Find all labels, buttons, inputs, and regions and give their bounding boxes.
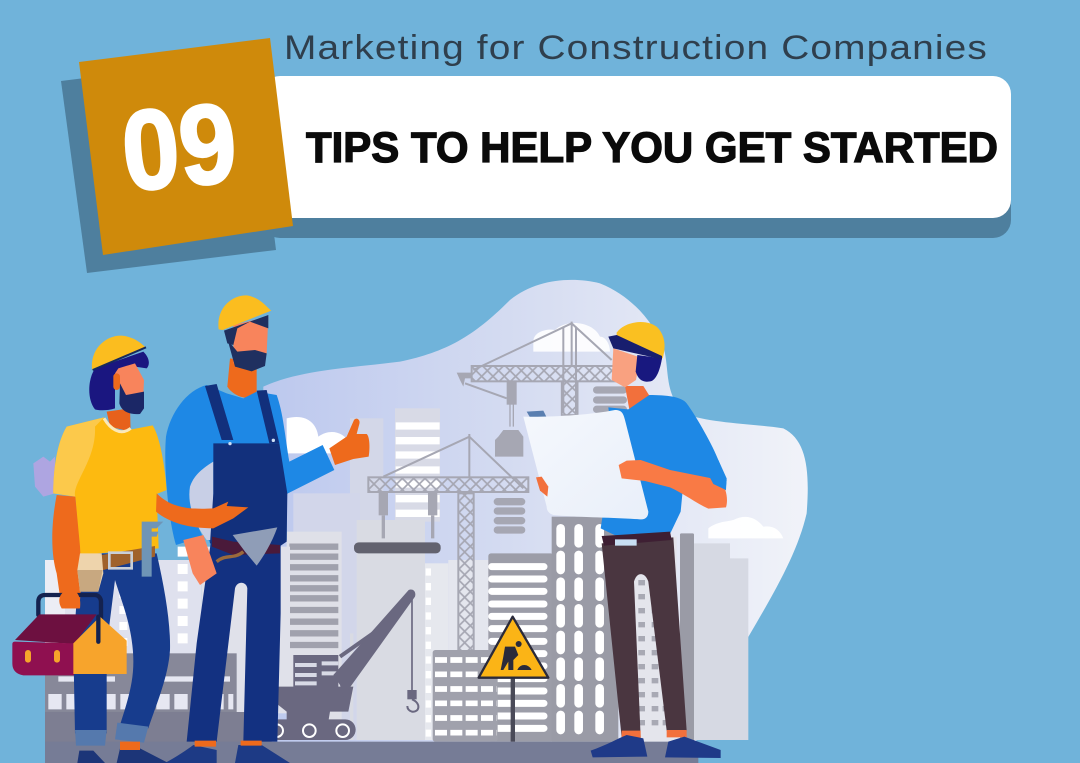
sleeve cuff — [703, 460, 727, 490]
phone — [527, 411, 547, 417]
blueprint sheet — [523, 410, 648, 519]
shirt — [601, 395, 727, 544]
title bar shadow — [262, 96, 1011, 238]
legs — [602, 537, 687, 737]
toolbox — [12, 590, 127, 675]
beard — [119, 383, 144, 414]
hanging arm — [52, 495, 82, 608]
subtitle: Marketing for Construction Companies — [284, 29, 988, 67]
cloud: top — [533, 323, 610, 352]
number badge shadow — [61, 57, 276, 273]
number badge — [79, 38, 293, 255]
cloud: behind thumb — [287, 417, 353, 453]
excavator arm — [333, 589, 415, 697]
background buildings — [45, 408, 748, 740]
ear — [113, 373, 120, 390]
shirt — [165, 385, 334, 545]
hard hat — [92, 336, 146, 369]
trouser cuffs — [75, 723, 148, 746]
background blob — [260, 280, 808, 763]
excavator cable and hook — [409, 597, 414, 690]
tall window building — [552, 517, 618, 742]
trowel — [233, 527, 277, 566]
crane load — [495, 430, 523, 457]
excavator tracks — [268, 719, 356, 740]
overalls — [210, 443, 287, 548]
belt — [602, 532, 672, 546]
counterweights — [497, 502, 522, 530]
hard hat — [218, 295, 271, 330]
tower crane front — [354, 434, 528, 653]
neck — [227, 358, 257, 398]
excavator — [268, 589, 418, 740]
tool belt — [82, 546, 155, 570]
beard — [228, 340, 267, 371]
left hand — [536, 477, 548, 497]
neck — [107, 408, 131, 432]
thumbs up hand — [329, 419, 369, 465]
toolbox worker's reaching arm and wrench — [142, 493, 248, 577]
construction scene illustration — [12, 280, 808, 763]
warning sign — [479, 617, 548, 742]
face — [233, 317, 268, 363]
lower hand — [183, 535, 217, 585]
title bar — [262, 76, 1011, 218]
cloud: right — [708, 517, 783, 538]
striped building — [488, 553, 553, 742]
worker with toolbox — [12, 336, 170, 763]
hair — [89, 352, 149, 410]
far right building — [693, 543, 748, 740]
tower crane back — [457, 322, 623, 457]
header banner — [61, 29, 1011, 273]
hair — [636, 355, 662, 382]
clouds — [287, 323, 783, 538]
shirt collar — [104, 418, 131, 432]
legs — [187, 543, 281, 742]
visor — [608, 335, 662, 359]
low window building — [433, 650, 498, 742]
worker with blueprint — [523, 322, 727, 758]
head — [89, 336, 149, 414]
shoes — [77, 748, 168, 763]
suspended beam — [354, 542, 441, 553]
small purple plant — [33, 457, 55, 497]
foreground buildings — [433, 517, 694, 742]
right window building — [633, 537, 677, 742]
legs — [73, 553, 170, 733]
worker with thumbs up — [165, 295, 369, 763]
head — [218, 295, 271, 371]
ground — [45, 742, 698, 763]
right arm — [619, 460, 727, 509]
number 09: 09 — [117, 79, 241, 215]
shoes — [165, 745, 290, 763]
striped grey building — [289, 547, 338, 645]
ankles and shoes — [622, 730, 687, 738]
scaffold block — [45, 653, 272, 742]
head — [608, 322, 665, 387]
face — [115, 363, 144, 395]
face — [612, 348, 640, 387]
utility belt — [212, 537, 280, 555]
hair — [224, 315, 268, 345]
shirt — [53, 417, 167, 555]
hard hat — [617, 322, 665, 358]
title: TIPS TO HELP YOU GET STARTED — [306, 124, 998, 172]
neck — [625, 386, 650, 409]
